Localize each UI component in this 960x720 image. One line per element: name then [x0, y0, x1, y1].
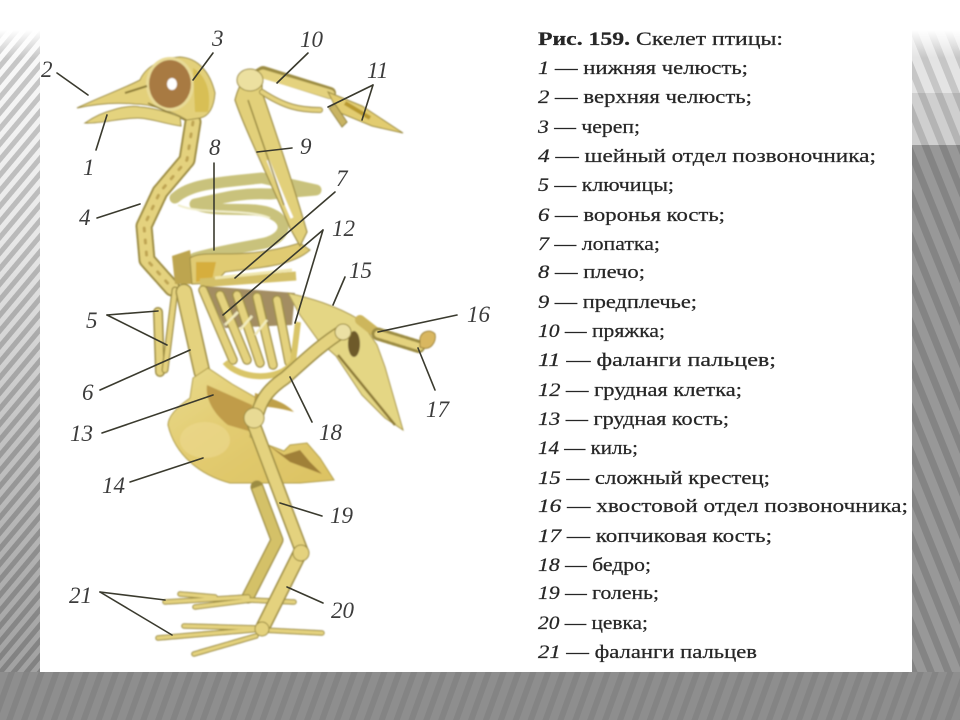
callout numbers on skeleton: 8	[209, 135, 221, 160]
callout numbers on skeleton: 3	[211, 26, 224, 51]
humerus and shoulder	[172, 243, 310, 284]
forearm	[235, 72, 307, 246]
callout numbers on skeleton: 20	[331, 598, 354, 623]
legend text block: 8 — плечо;	[538, 262, 645, 283]
legend text block: 18 — бедро;	[538, 555, 651, 576]
tarsus	[263, 545, 309, 627]
illustration: bird skeleton	[77, 57, 435, 654]
callout numbers on skeleton: 19	[330, 503, 354, 528]
legend text block: 2 — верхняя челюсть;	[538, 87, 752, 108]
legend text block	[537, 29, 908, 663]
legend text block: 6 — воронья кость;	[538, 205, 725, 226]
legend text block: 19 — голень;	[538, 583, 659, 604]
legend text block: 11 — фаланги пальцев;	[538, 350, 776, 371]
callout numbers on skeleton: 6	[82, 380, 94, 405]
callout numbers on skeleton: 18	[319, 420, 342, 445]
legend text block: 9 — предплечье;	[538, 292, 697, 313]
legend text block: 10 — пряжка;	[538, 321, 665, 342]
callout numbers on skeleton: 4	[79, 205, 90, 230]
callout numbers on skeleton: 5	[86, 308, 98, 333]
legend text block: 4 — шейный отдел позвоночника;	[538, 146, 876, 167]
pelvis and synsacrum	[288, 293, 403, 430]
legend text block: Рис. 159. Скелет птицы:	[538, 29, 783, 50]
tibia	[254, 425, 302, 552]
callout numbers on skeleton	[41, 26, 490, 623]
legend text block: 7 — лопатка;	[538, 234, 660, 255]
callout numbers on skeleton: 11	[367, 58, 388, 83]
coracoid	[184, 292, 202, 372]
callout numbers on skeleton: 7	[336, 166, 349, 191]
tail vertebrae	[378, 331, 435, 348]
lower jaw	[85, 106, 181, 126]
wishbone	[158, 290, 175, 372]
legend text block: 5 — ключицы;	[538, 175, 674, 196]
callout numbers on skeleton: 15	[349, 258, 372, 283]
far wing	[175, 178, 316, 258]
leader lines	[57, 53, 457, 635]
femur	[244, 324, 351, 428]
callout numbers on skeleton: 1	[83, 155, 94, 180]
legend text block: 12 — грудная клетка;	[538, 380, 742, 401]
near foot	[158, 622, 322, 654]
legend text block: 17 — копчиковая кость;	[538, 526, 772, 547]
legend text block: 20 — цевка;	[538, 613, 648, 634]
sternum and keel	[168, 368, 334, 483]
callout numbers on skeleton: 17	[426, 397, 450, 422]
callout numbers on skeleton: 12	[332, 216, 355, 241]
legend text block: 16 — хвостовой отдел позвоночника;	[538, 496, 908, 517]
ribs	[203, 286, 298, 376]
legend text block: 3 — череп;	[537, 117, 640, 138]
callout numbers on skeleton: 16	[467, 302, 490, 327]
callout numbers on skeleton: 2	[41, 57, 52, 82]
callout numbers on skeleton: 14	[102, 473, 125, 498]
wing hand	[237, 69, 403, 133]
legend text block: 15 — сложный крестец;	[538, 468, 770, 489]
callout numbers on skeleton: 21	[69, 583, 92, 608]
legend text block: 13 — грудная кость;	[538, 409, 729, 430]
callout numbers on skeleton: 13	[70, 421, 93, 446]
callout numbers on skeleton: 9	[300, 134, 312, 159]
neck vertebrae	[144, 122, 193, 288]
callout numbers on skeleton: 10	[300, 27, 324, 52]
skull	[77, 57, 215, 120]
legend text block: 1 — нижняя челюсть;	[538, 58, 748, 79]
legend text block: 14 — киль;	[538, 438, 638, 459]
legend text block: 21 — фаланги пальцев	[538, 642, 757, 663]
far leg	[165, 487, 294, 607]
